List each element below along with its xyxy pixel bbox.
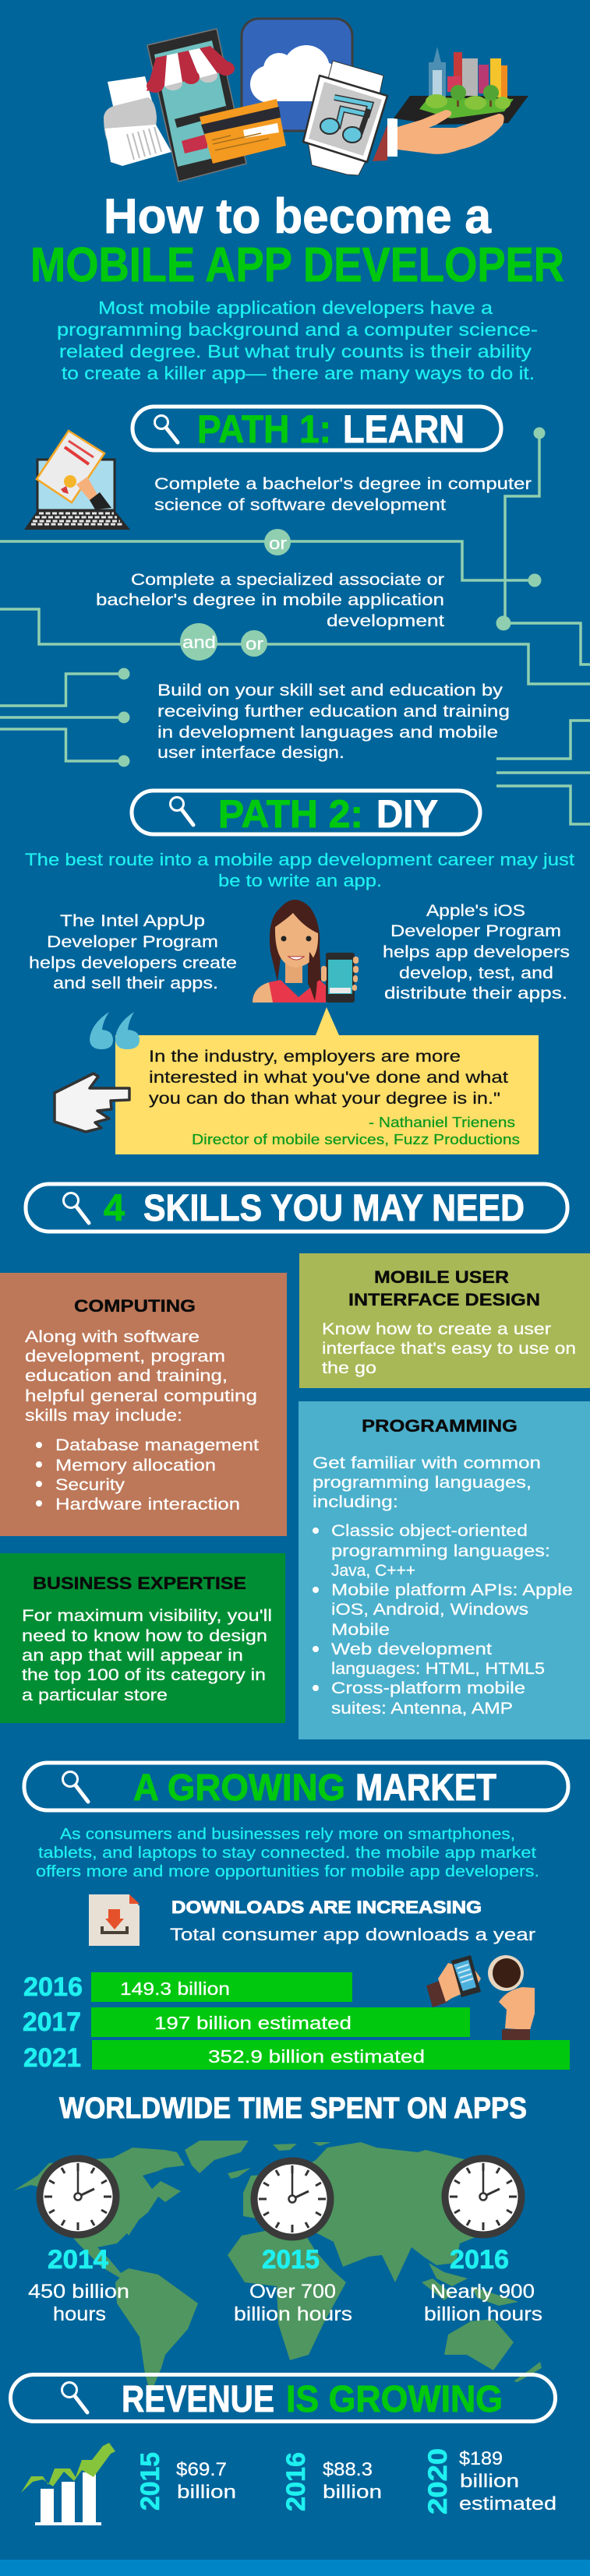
connector: and (180, 623, 217, 661)
quote text (149, 1048, 508, 1108)
icon: clock 2016 (445, 2158, 521, 2235)
text: bachelor's degree: Complete a bachelor's degree in computer (154, 475, 532, 493)
icon: credit card (200, 99, 286, 164)
world map (14, 2141, 542, 2394)
panel: programming: Cross-platform mobile (331, 1679, 525, 1697)
panel: programming: PROGRAMMING (362, 1416, 518, 1436)
stat: 2014 hours: 450 billion (28, 2281, 129, 2303)
heading: path 1 learn: PATH 1: (197, 407, 331, 451)
bar chart: downloads: 352.9 billion estimated (208, 2046, 425, 2067)
icon: download file (89, 1894, 140, 1946)
panel: programming: programming languages, (313, 1474, 532, 1492)
stat: revenue 2016: $88.3 (323, 2459, 373, 2480)
stat: revenue 2020 (423, 2448, 556, 2514)
stat: revenue 2020: 2020 (423, 2448, 453, 2514)
icon: pointing hand (55, 1073, 129, 1132)
stat: 2016 hours (424, 2245, 542, 2325)
stat: revenue 2016: billion (323, 2482, 382, 2503)
heading: worldwide time: WORLDWIDE TIME SPENT ON APPS (59, 2092, 527, 2125)
heading: revenue is growing: IS GROWING (286, 2379, 503, 2420)
icon: clock 2015 (254, 2161, 330, 2237)
icon: magnifier (64, 1193, 89, 1223)
stat: 2015 hours: billion hours (234, 2303, 352, 2325)
text: specialized degree (96, 571, 444, 630)
stat: 2016 hours: Nearly 900 (430, 2281, 535, 2303)
stat: revenue 2016 (281, 2452, 382, 2511)
text: specialized degree: development (327, 612, 444, 630)
panel: mobile user interface design: INTERFACE DESIGN (348, 1290, 540, 1309)
icon: quote marks (90, 1012, 140, 1049)
hero illustration: apps and devices (104, 19, 528, 181)
text: intel appup: Developer Program (47, 933, 218, 951)
heading: path 1 learn: LEARN (343, 407, 465, 451)
text: best route: be to write an app. (218, 871, 382, 890)
text: market intro (36, 1826, 539, 1880)
panel: programming (299, 1401, 590, 1739)
text: apple ios: develop, test, and (399, 964, 553, 982)
icon: magnifier (170, 798, 193, 825)
stat: 2015 hours: 2015 (262, 2245, 320, 2275)
intro text (57, 298, 538, 383)
panel: computing: development, program (25, 1348, 225, 1366)
icon: woman holding phone (253, 900, 359, 1003)
stat: revenue 2015 (136, 2452, 236, 2511)
quote text: In the industry, employers are more (149, 1048, 461, 1066)
panel: business expertise: For maximum visibility, you'll (22, 1607, 272, 1625)
quote attribution (192, 1115, 520, 1147)
icon: phone with storefront (147, 29, 246, 181)
panel: business expertise: an app that will appear in (22, 1647, 243, 1665)
text: best route: The best route into a mobile app development career may just (25, 850, 574, 869)
panel: programming: Get familiar with common (313, 1454, 541, 1472)
heading: 4 skills (26, 1184, 567, 1232)
text: market intro: As consumers and businesses rely more on smartphones, (60, 1826, 515, 1843)
text: market intro: offers more and more opportunities for mobile app developers. (36, 1863, 539, 1880)
stat: revenue 2015: billion (177, 2482, 236, 2503)
text: bachelor's degree (154, 475, 532, 514)
circuit lines and connector dots (0, 427, 590, 824)
heading: a growing market: A GROWING (133, 1767, 345, 1809)
panel: business expertise: BUSINESS EXPERTISE (33, 1573, 246, 1593)
panel: programming: Mobile platform APIs: Apple (331, 1581, 573, 1599)
panel: programming: languages: HTML, HTML5 (331, 1660, 545, 1678)
stat: 2016 hours: billion hours (424, 2303, 542, 2325)
quote attribution: - Nathaniel Trienens (369, 1115, 515, 1130)
stat: revenue 2015: 2015 (136, 2452, 165, 2511)
intro text: related degree. But what truly counts is their ability (59, 341, 532, 361)
panel: computing: Security (55, 1476, 125, 1494)
text: specialized degree: bachelor's degree in mobile application (96, 591, 444, 609)
panel: business expertise: the top 100 of its category in (22, 1666, 266, 1684)
icon: laptop with diploma (24, 431, 130, 530)
heading: revenue is growing: REVENUE (122, 2379, 274, 2420)
connector: or: or (269, 534, 287, 553)
title (30, 189, 564, 292)
panel: computing: Memory allocation (55, 1457, 216, 1475)
text: apple ios: distribute their apps. (384, 985, 567, 1003)
panel: computing: education and training, (25, 1367, 228, 1385)
panel: business expertise: need to know how to design (22, 1627, 267, 1645)
panel: programming: iOS, Android, Windows (331, 1601, 528, 1619)
stat: 2014 hours: 2014 (48, 2245, 108, 2275)
text: intel appup (29, 912, 237, 992)
heading: path 2 diy: DIY (376, 792, 438, 836)
heading: a growing market (24, 1763, 568, 1810)
heading: a growing market: MARKET (355, 1767, 496, 1809)
bar chart: downloads: 149.3 billion (120, 1979, 230, 1999)
panel: programming: Web development (331, 1640, 492, 1658)
heading: path 2 diy: PATH 2: (218, 792, 363, 836)
text: further education: Build on your skill set and education by (157, 682, 503, 700)
panel: programming: including: (313, 1493, 398, 1511)
connector: or (264, 529, 291, 555)
title: How to become a (104, 189, 492, 244)
panel: programming: programming languages: (331, 1542, 550, 1560)
text: apple ios: Developer Program (390, 922, 561, 940)
heading: 4 skills: 4 (104, 1188, 125, 1229)
icon: receipt printer (104, 76, 171, 166)
text: intel appup: and sell their apps. (53, 974, 218, 992)
text: apple ios (383, 902, 570, 1003)
icon: hand holding phone with city (373, 47, 528, 161)
icon: clock 2014 (40, 2158, 116, 2235)
panel: programming: Classic object-oriented (331, 1522, 528, 1540)
bar chart: downloads: 2021 (23, 2043, 81, 2073)
panel: programming: Mobile (331, 1621, 390, 1639)
stat: revenue 2015: $69.7 (176, 2459, 227, 2480)
icon: cloud app tile (242, 19, 352, 131)
text: intel appup: helps developers create (29, 954, 237, 972)
connector: or (241, 630, 267, 657)
footer band (0, 2560, 590, 2576)
stat: 2014 hours: hours (53, 2303, 106, 2325)
panel: business expertise: a particular store (22, 1686, 168, 1704)
panel: computing: helpful general computing (25, 1387, 257, 1405)
bar chart: downloads: 2016 (23, 1972, 83, 2002)
text: further education: receiving further education and training (157, 703, 510, 721)
icon: growth chart (21, 2443, 115, 2525)
bar chart: downloads: 2017 (23, 2007, 81, 2037)
connector: and: and (182, 633, 216, 652)
panel: computing: Hardware interaction (55, 1496, 240, 1514)
icon: magnifier (62, 1771, 88, 1802)
city trees (426, 85, 511, 110)
quote attribution: Director of mobile services, Fuzz Productions (192, 1132, 520, 1147)
bar chart: downloads: 197 billion estimated (154, 2013, 352, 2033)
panel: mobile user interface design: Know how to create a user (322, 1320, 551, 1338)
panel: mobile user interface design: MOBILE USER (374, 1267, 509, 1287)
callout: quote box (90, 1007, 539, 1154)
panel: computing (0, 1273, 287, 1536)
panel: computing: Along with software (25, 1328, 200, 1346)
stat: 2016 hours: 2016 (450, 2245, 509, 2275)
text: intel appup: The Intel AppUp (60, 912, 205, 930)
stat: 2014 hours (28, 2245, 129, 2325)
text: downloads heading (170, 1898, 535, 1944)
text: market intro: tablets, and laptops to stay connected. the mobile app market (38, 1845, 537, 1862)
text: apple ios: helps app developers (383, 943, 570, 961)
heading: path 1 learn (132, 407, 501, 451)
bar chart: downloads (23, 1972, 570, 2073)
text: downloads heading: Total consumer app downloads a year (170, 1925, 535, 1944)
panel: computing: COMPUTING (74, 1296, 196, 1316)
icon: smartwatch with music note (303, 61, 387, 175)
quote text: interested in what you've done and what (149, 1069, 508, 1087)
icon: magnifier (62, 2382, 87, 2412)
stat: revenue 2016: 2016 (281, 2452, 311, 2511)
heading: revenue is growing (11, 2374, 555, 2421)
panel: computing: skills may include: (25, 1407, 182, 1425)
text: further education: user interface design. (157, 744, 344, 762)
text: specialized degree: Complete a specialized associate or (131, 571, 444, 589)
quote text: you can do than what your degree is in." (149, 1090, 500, 1108)
intro text: Most mobile application developers have a (98, 298, 493, 318)
stat: 2015 hours (234, 2245, 352, 2325)
text: bachelor's degree: science of software development (154, 496, 446, 514)
text: downloads heading: DOWNLOADS ARE INCREASING (171, 1898, 482, 1917)
stat: revenue 2020: $189 (459, 2448, 503, 2469)
stat: revenue 2020: estimated (459, 2493, 556, 2514)
text: further education: in development languages and mobile (157, 724, 498, 742)
panel: mobile user interface design: interface that's easy to use on (322, 1340, 576, 1358)
text: best route (25, 850, 574, 890)
heading: 4 skills: SKILLS YOU MAY NEED (143, 1188, 525, 1229)
panel: programming: Java, C+++ (331, 1562, 415, 1580)
icon: hands with phone and coffee (426, 1955, 535, 2040)
panel: mobile user interface design: the go (322, 1359, 376, 1377)
city buildings (429, 47, 507, 103)
connector: or: or (246, 634, 263, 654)
icon: magnifier (154, 416, 178, 442)
panel: business expertise (0, 1553, 285, 1723)
panel: computing: Database management (55, 1436, 259, 1454)
intro text: to create a killer app— there are many ways to do it. (62, 363, 535, 383)
stat: revenue 2020: billion (460, 2471, 519, 2492)
text: further education (157, 682, 510, 762)
panel: programming: suites: Antenna, AMP (331, 1700, 513, 1718)
heading: path 2 diy (132, 791, 480, 836)
stat: 2015 hours: Over 700 (249, 2281, 336, 2303)
panel: mobile user interface design (299, 1253, 590, 1388)
text: apple ios: Apple's iOS (426, 902, 525, 920)
intro text: programming background and a computer science- (57, 319, 538, 340)
